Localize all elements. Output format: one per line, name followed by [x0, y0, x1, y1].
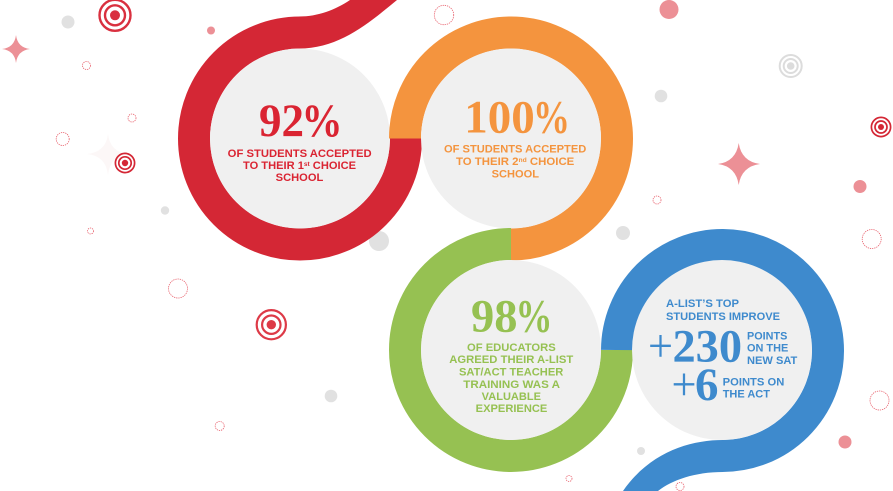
label: ACT: POINTS ON	[723, 377, 784, 389]
pink dots	[207, 0, 866, 448]
panel: 98% educators	[405, 244, 617, 456]
inner disc	[421, 48, 601, 228]
intro text: A-LIST’S TOP	[666, 298, 739, 310]
caption: VALUABLE	[482, 391, 541, 403]
red ring	[194, 0, 406, 245]
icon: grey target	[780, 55, 802, 77]
icon: target left	[115, 153, 135, 173]
statistic: +6	[672, 359, 718, 411]
icon: target right	[871, 117, 891, 137]
inner disc	[632, 260, 812, 440]
label: ACT: THE ACT	[723, 389, 770, 401]
statistic: 100	[464, 92, 535, 144]
caption	[444, 144, 586, 181]
statistic	[471, 291, 552, 343]
icon: target top left	[100, 0, 130, 31]
caption: AGREED THEIR A-LIST	[449, 354, 574, 366]
panel: top student score gains	[617, 245, 828, 491]
intro text: STUDENTS IMPROVE	[666, 311, 780, 323]
caption: EXPERIENCE	[476, 403, 547, 415]
caption: OF EDUCATORS	[467, 342, 556, 354]
green ring	[405, 244, 617, 456]
inner disc	[210, 48, 390, 228]
caption: OF STUDENTS ACCEPTED	[228, 148, 372, 160]
intro text	[666, 298, 780, 323]
caption: TRAINING WAS A	[463, 379, 560, 391]
panel: 92% first choice	[194, 0, 406, 245]
caption: SCHOOL	[276, 172, 324, 184]
label: new SAT: NEW SAT	[747, 355, 798, 367]
inner disc	[421, 260, 601, 440]
label: ACT	[723, 377, 784, 401]
orange ring	[405, 33, 617, 244]
caption: TO THEIR 2	[456, 156, 516, 168]
caption: SCHOOL	[492, 169, 539, 181]
statistic	[464, 92, 570, 144]
caption	[449, 342, 574, 415]
statistic: +230: +	[648, 321, 673, 373]
label: new SAT: ON THE	[747, 343, 788, 355]
statistic: %	[516, 291, 552, 343]
sparkle stars	[2, 35, 760, 185]
caption	[228, 148, 372, 184]
statistic	[259, 95, 342, 147]
label: new SAT	[747, 330, 798, 367]
label: new SAT: POINTS	[747, 330, 787, 342]
caption: SAT/ACT TEACHER	[459, 366, 563, 378]
statistic: %	[533, 92, 570, 144]
caption: CHOICE	[310, 160, 356, 172]
statistic: +230: 230	[672, 321, 742, 373]
panel: 100% second choice	[405, 33, 617, 244]
caption: CHOICE	[527, 156, 574, 168]
caption: TO THEIR 1	[243, 160, 303, 172]
caption: OF STUDENTS ACCEPTED	[444, 144, 586, 156]
caption: st	[304, 161, 311, 168]
blue ring	[617, 245, 828, 491]
statistic: %	[302, 95, 342, 147]
statistic: +6: 6	[695, 359, 718, 411]
icon: target lower left	[257, 310, 286, 339]
grey dots	[62, 16, 667, 455]
statistic: 98	[471, 291, 518, 343]
statistic: 92	[259, 95, 304, 147]
statistic: +6: +	[672, 359, 696, 411]
caption: nd	[519, 157, 527, 164]
